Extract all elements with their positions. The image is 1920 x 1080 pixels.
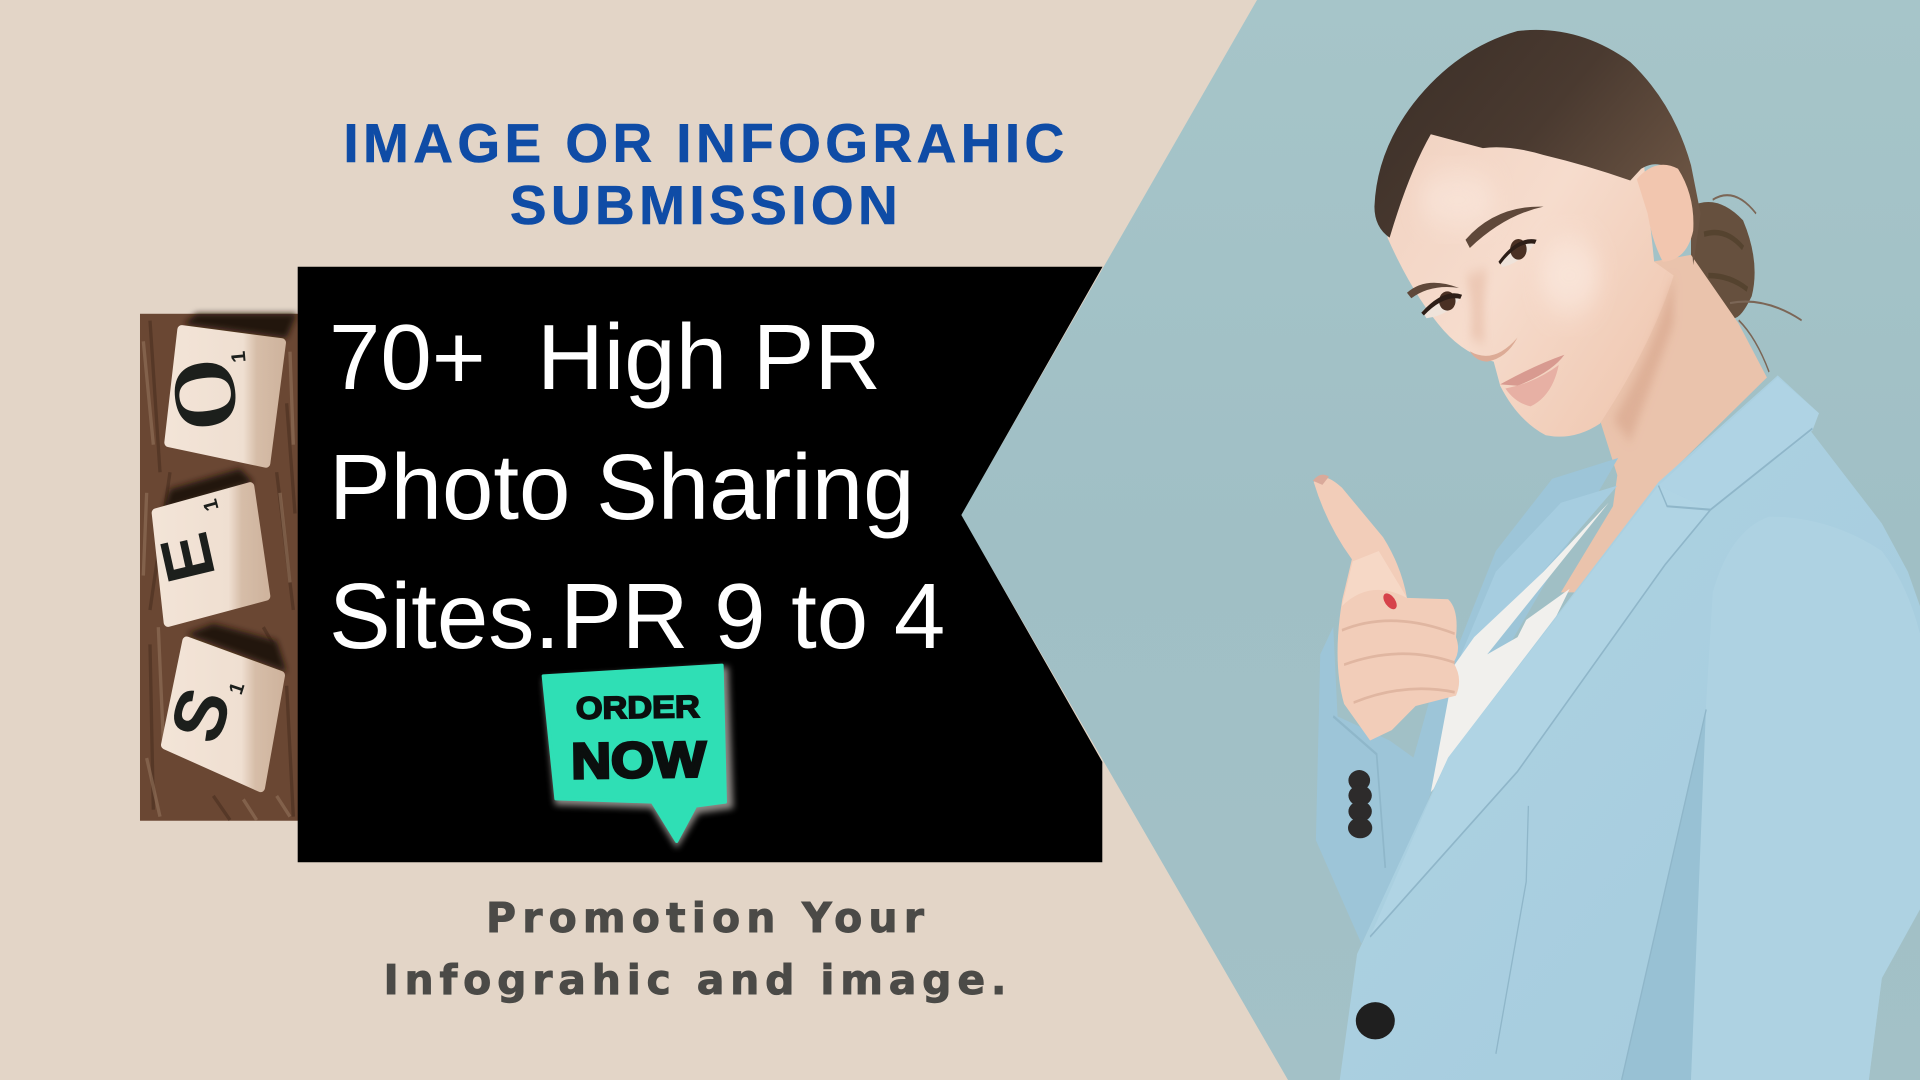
eyes and brows — [1407, 207, 1544, 318]
order now badge: ORDER — [576, 689, 700, 726]
tile O — [150, 330, 282, 463]
order now badge: NOW — [571, 731, 707, 789]
bottom caption: Infograhic and image. — [384, 956, 1006, 1004]
tile O: O — [150, 352, 258, 437]
bun and stray hair — [1691, 195, 1802, 372]
main headline: Photo Sharing — [329, 435, 915, 539]
jacket button — [1356, 1002, 1395, 1039]
title: IMAGE OR INFOGRAHIC — [343, 112, 1069, 174]
tile E: 1 — [200, 496, 224, 513]
bottom caption: Promotion Your — [486, 894, 925, 942]
tile E — [145, 487, 266, 622]
white blouse — [1431, 503, 1609, 792]
bottom caption — [384, 894, 1006, 1004]
hand pointing — [1313, 475, 1459, 740]
face — [1387, 124, 1674, 441]
nose shadow — [1470, 338, 1518, 362]
woman pointing — [1313, 30, 1920, 1080]
tile E: E — [145, 526, 230, 589]
tile S — [154, 641, 281, 788]
order now badge — [543, 665, 733, 848]
main headline: 70+ High PR — [329, 305, 881, 409]
title: SUBMISSION — [510, 174, 902, 236]
photo: SEO scrabble tiles — [140, 314, 298, 821]
jacket body — [1340, 375, 1920, 1080]
cuff buttons — [1348, 770, 1372, 838]
hair — [1374, 30, 1701, 265]
tile shadows — [163, 314, 297, 672]
main headline — [329, 305, 945, 668]
neck and chest — [1561, 255, 1767, 592]
tile O: 1 — [228, 350, 251, 364]
far sleeve and cuff — [1316, 458, 1618, 944]
tile S: S — [154, 678, 247, 752]
main headline: Sites.PR 9 to 4 — [329, 564, 945, 668]
tile S: 1 — [225, 680, 249, 697]
teal angled panel — [961, 0, 1920, 1080]
lips — [1500, 355, 1564, 406]
title — [343, 112, 1069, 236]
ear — [1637, 165, 1693, 262]
black arrow panel — [298, 267, 1102, 862]
